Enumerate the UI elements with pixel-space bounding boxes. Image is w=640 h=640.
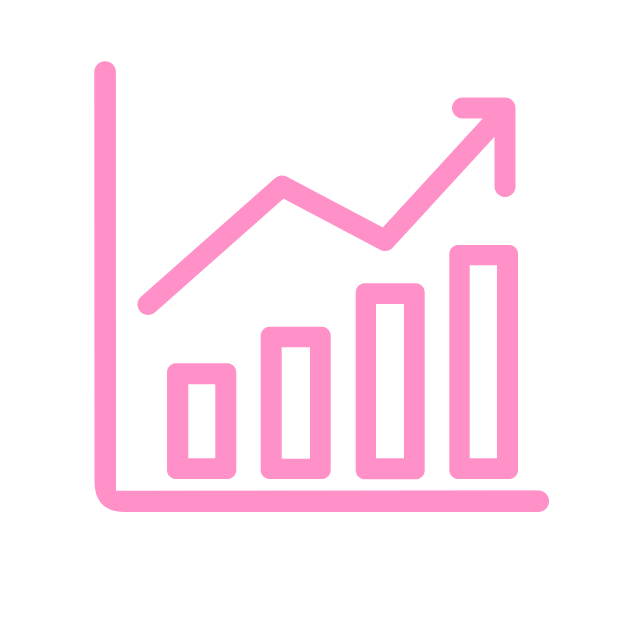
bar 3	[356, 283, 425, 479]
chart axes	[94, 61, 549, 512]
bar 1	[167, 363, 236, 479]
bar 2	[261, 327, 331, 479]
bar 4	[449, 245, 518, 479]
trend line with arrow	[148, 108, 505, 304]
